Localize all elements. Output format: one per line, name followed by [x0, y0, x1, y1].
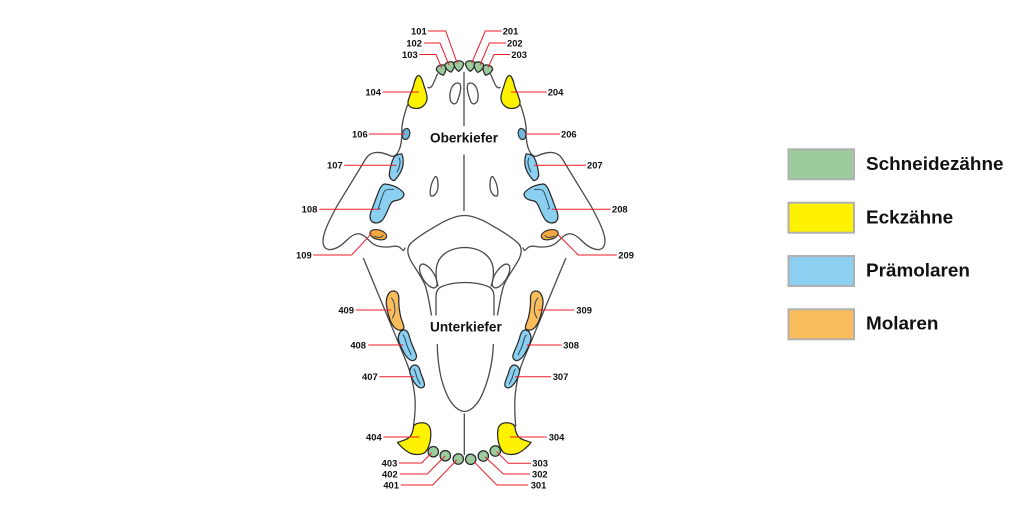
tooth labels: lower right: 307 — [553, 371, 568, 382]
tooth labels: upper right: 208 — [612, 204, 628, 215]
tooth labels: lower left: 409 — [338, 304, 354, 315]
tooth labels: upper right: 201 — [503, 25, 518, 36]
midline, upper jaw — [463, 72, 465, 210]
tooth labels: upper right: 202 — [507, 37, 523, 48]
tooth labels: upper left: 109 — [296, 249, 312, 260]
oval openings — [416, 261, 513, 291]
tooth labels: upper left: 101 — [411, 25, 427, 36]
legend item: Prämolaren — [788, 256, 970, 286]
tooth labels: lower left — [338, 304, 457, 490]
tooth labels: upper left: 104 — [365, 86, 382, 97]
legend item: Prämolaren: Prämolaren — [866, 260, 970, 281]
tooth labels: lower right: 302 — [532, 468, 548, 479]
tooth labels: upper right: 209 — [618, 249, 634, 260]
tooth labels: upper left: 102 — [406, 37, 422, 48]
tooth labels: lower left: 407 — [362, 371, 378, 382]
midline, lower jaw — [463, 414, 465, 454]
tooth labels: upper right: 203 — [511, 49, 527, 60]
tooth labels: lower right: 301 — [531, 479, 546, 490]
heading: Unterkiefer: Unterkiefer — [430, 320, 502, 335]
tooth labels: upper right: 206 — [561, 128, 577, 139]
teeth: molars upper — [369, 228, 559, 242]
incisive foramina — [450, 83, 478, 104]
tooth labels: lower right: 303 — [532, 458, 548, 469]
dome — [436, 248, 493, 286]
tooth labels: upper right: 204 — [548, 86, 564, 97]
upper jaw outline, left — [323, 74, 438, 250]
legend item: Molaren: Molaren — [866, 313, 938, 334]
tooth labels: lower right: 304 — [549, 431, 565, 442]
legend item: Eckzähne: Eckzähne — [866, 207, 953, 228]
tooth labels: lower left: 408 — [350, 339, 366, 350]
lower arch — [436, 282, 494, 315]
mandible, left — [364, 258, 415, 426]
tooth labels: lower left: 402 — [382, 468, 398, 479]
legend item: Schneidezähne: Schneidezähne — [866, 154, 1004, 175]
mandible, right — [515, 258, 566, 426]
heading: Oberkiefer: Oberkiefer — [430, 131, 499, 146]
teeth: canines — [398, 76, 531, 455]
lower jaw palate — [437, 344, 493, 412]
teeth: premolars lower — [398, 330, 531, 388]
legend item: Molaren — [788, 309, 938, 339]
tooth labels: upper right: 207 — [587, 160, 603, 171]
tooth labels: lower right: 309 — [576, 304, 592, 315]
tooth labels: lower right — [474, 304, 592, 490]
teeth: molars lower — [386, 291, 543, 330]
teeth: premolars upper — [370, 128, 558, 223]
teeth: incisors lower — [428, 446, 500, 464]
tooth labels: lower right: 308 — [563, 339, 579, 350]
tooth labels: upper left: 106 — [352, 128, 368, 139]
tooth labels: lower left: 403 — [382, 457, 397, 468]
diagram: skull outline — [323, 72, 605, 454]
tooth labels: upper right — [472, 25, 634, 260]
tooth labels: upper left: 108 — [302, 204, 317, 215]
legend item: Eckzähne — [788, 203, 953, 233]
tooth labels: upper left: 107 — [327, 160, 343, 171]
tooth labels: lower left: 401 — [383, 479, 399, 490]
central skull base — [408, 216, 521, 315]
teeth: incisors upper — [435, 61, 494, 77]
tooth labels: upper left — [296, 25, 457, 260]
upper jaw outline, right — [490, 74, 605, 250]
tooth labels: upper left: 103 — [402, 49, 418, 60]
tooth labels: lower left: 404 — [366, 431, 382, 442]
legend item: Schneidezähne — [788, 149, 1004, 179]
palatine foramina — [430, 177, 498, 196]
legend — [788, 149, 1004, 339]
